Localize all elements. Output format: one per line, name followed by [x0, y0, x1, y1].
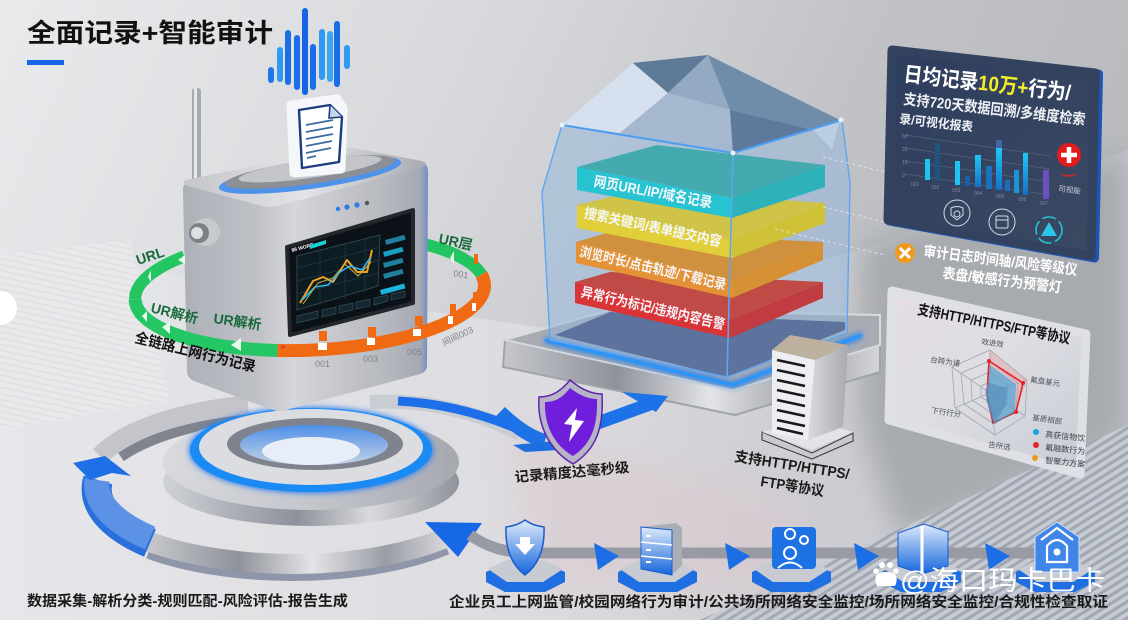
icon: server tower [762, 335, 853, 459]
icon: orange badge [895, 243, 915, 263]
dome glass front [542, 120, 850, 377]
flow connector [470, 535, 1050, 553]
title: 全面记录+智能审计 [27, 18, 273, 48]
device top slot [217, 148, 403, 202]
ring labels: URL [134, 244, 167, 268]
layer: browsing (orange) [576, 232, 823, 298]
bottom label: pipeline: 数据采集-解析分类-规则匹配-风险评估-报告生成 [27, 592, 349, 610]
ring: front URL band [135, 274, 487, 358]
radar labels: 下行行分 [931, 405, 962, 419]
loop lower band [150, 544, 445, 570]
panel bar chart: 10 [902, 160, 908, 166]
flow step 4: book [882, 524, 961, 592]
loop upper-left arc [100, 405, 251, 457]
device: audit appliance [183, 148, 428, 411]
arrow 4 [985, 543, 1010, 570]
radar labels: 氟盘基元 [1030, 374, 1061, 388]
layer: keywords (yellow): 搜索关键词/表单提交内容 [583, 205, 723, 249]
ring markers [142, 251, 478, 351]
callout: audit log: 审计日志时间轴/风险等级仪 [923, 242, 1079, 279]
device body [183, 163, 428, 411]
loop left blue arrow [73, 456, 150, 543]
shelf: storage platform [503, 310, 880, 415]
loop upper-right ribbon [370, 402, 520, 434]
antenna knob [189, 218, 220, 246]
screen header: 88 WORD [291, 242, 315, 254]
dome back glass [542, 120, 850, 377]
radar labels: 告所选 [988, 439, 1012, 452]
panel bar chart: 003 [952, 188, 961, 194]
arrow head: loop end [425, 522, 482, 557]
bottom label: scenarios: 企业员工上网监管/校园网络行为审计/公共场所网络安全监控/场所网络安全监控/合规性检查取证 [449, 593, 1109, 611]
panel bar chart: 007 [1040, 201, 1049, 207]
flow step 5: alarm house [1016, 522, 1095, 592]
radar legend: 智聚力方案 [1045, 455, 1086, 469]
callout: audit log: 表盘/敏感行为预警灯 [942, 264, 1063, 297]
screen line chart [297, 235, 380, 310]
label: precision: 记录精度达毫秒级 [514, 459, 630, 485]
panel icons [944, 200, 1062, 243]
icon: purple shield [539, 380, 602, 464]
panel: radar card [889, 291, 1086, 474]
layer: URL record (teal): 网页URL/IP/域名记录 [592, 172, 714, 212]
arrow: shield to platform ribbon [500, 392, 668, 452]
callout: audit log [895, 242, 1079, 297]
layer: anomaly (red): 异常行为标记/违规内容告警 [580, 284, 726, 332]
screen bottom buttons [297, 291, 405, 323]
panel bar chart: 0 [902, 173, 905, 179]
panel text: 支持720天数据回溯/多维度检索 [903, 90, 1086, 129]
panel bar chart: 006 [1018, 197, 1027, 203]
glass dome [542, 55, 850, 377]
screen side list [380, 235, 406, 295]
icon: paw [873, 562, 899, 586]
icon: red alert pin: 司视能 [1058, 183, 1082, 196]
dome roof [560, 55, 844, 156]
radar chart [952, 350, 1027, 435]
icon: sound waveform [271, 11, 347, 92]
icon: document tile [291, 99, 343, 173]
panel bar chart: 20 [902, 147, 908, 153]
ring: back segments of URL band [133, 241, 482, 300]
layer: keywords (yellow) [577, 190, 825, 258]
ring labels: UR层 [437, 230, 474, 253]
ring labels: 003 [363, 354, 378, 364]
ring labels: 间间003 [440, 324, 475, 348]
ring labels [133, 230, 475, 376]
ring labels: 全链路上网行为记录 [133, 328, 258, 376]
flow step 2: server [618, 523, 697, 592]
arrow 3 [854, 543, 879, 570]
device status dots [336, 201, 369, 211]
dashed connectors [775, 157, 885, 300]
panel bar chart [902, 134, 1050, 207]
ring labels: 005 [407, 347, 422, 357]
radar labels: 台跨为诸 [930, 354, 961, 368]
radar labels [930, 336, 1063, 452]
radar labels: 效进效 [981, 336, 1005, 349]
panel text: 录/可视化报表 [899, 111, 974, 134]
panel: daily records [888, 50, 1098, 258]
panel bar chart: 005 [996, 194, 1005, 200]
layer: browsing (orange): 浏览时长/点击轨迹/下载记录 [578, 243, 728, 293]
device antenna [192, 88, 201, 228]
radar labels: 基质相部 [1032, 412, 1063, 426]
card heading: 支持HTTP/HTTPS/FTP等协议 [916, 300, 1072, 348]
flow step 1: employee monitoring shield [486, 520, 565, 592]
label: protocol: FTP等协议 [759, 472, 826, 500]
device top [183, 148, 426, 207]
panel bar chart: 002 [931, 185, 940, 191]
base disc [163, 407, 459, 526]
panel bar chart: 004 [974, 191, 983, 197]
layer: URL record (teal) [577, 145, 825, 218]
radar legend: 氟融数行为 [1045, 442, 1086, 456]
panel bar chart: 001 [911, 182, 920, 188]
ring labels: 001 [453, 268, 469, 281]
radar legend [1032, 429, 1086, 469]
arrow 1 [594, 543, 619, 570]
device screen [287, 210, 413, 335]
panel heading: 日均记录10万+行为/ [902, 63, 1072, 105]
ring labels: 001 [315, 359, 330, 369]
panel bar chart: 60 [902, 134, 908, 140]
ring labels: UR解析 [149, 299, 200, 327]
flow ring: big metal loop [73, 401, 520, 570]
flow step 3: users [752, 527, 831, 592]
icon: red alert pin [1057, 143, 1082, 196]
ring labels: UR解析 [213, 310, 263, 333]
watermark: @海口玛卡巴卡 [900, 566, 1105, 596]
label: protocol: 支持HTTP/HTTPS/ [733, 448, 851, 483]
title [27, 18, 273, 65]
label: protocol [733, 448, 851, 500]
arrow 2 [725, 543, 750, 570]
radar legend: 高获信物饮 [1045, 429, 1086, 443]
layer: anomaly (red) [575, 272, 823, 338]
